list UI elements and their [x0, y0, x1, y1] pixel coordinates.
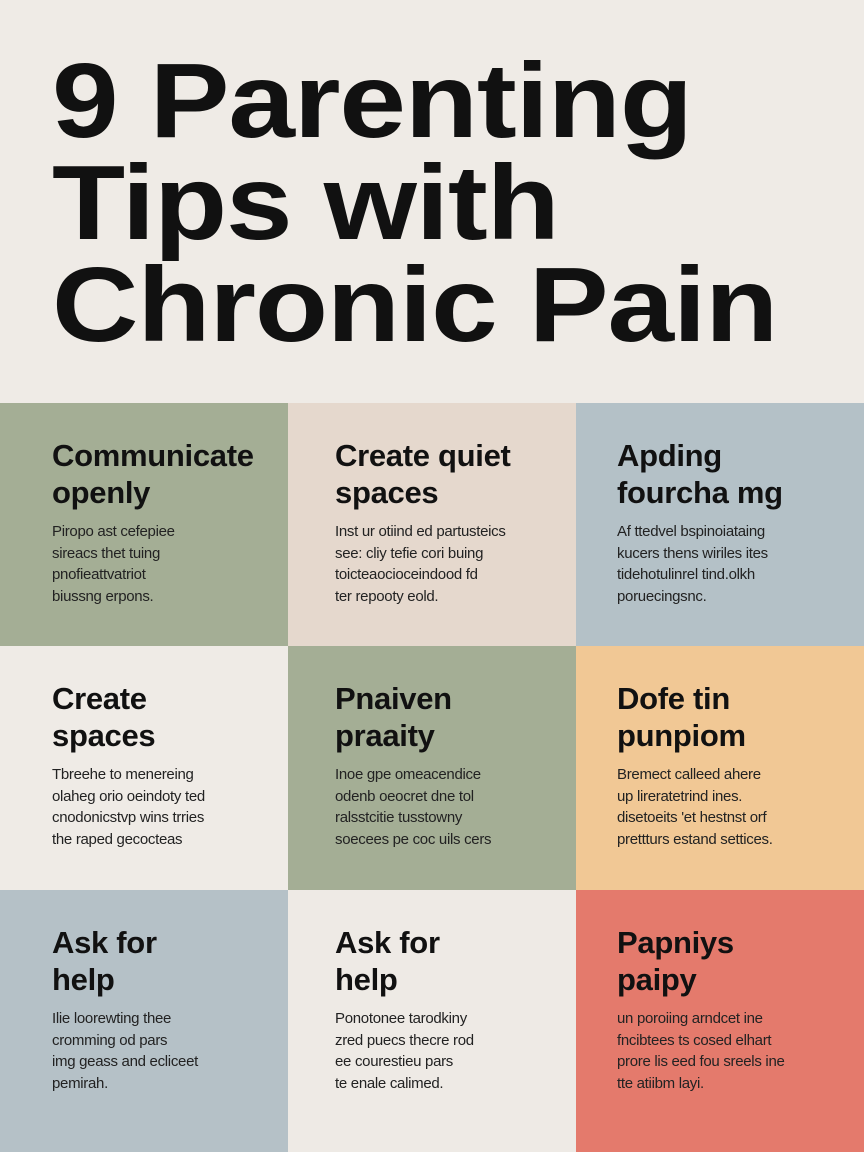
- panel: create quiet spaces: toicteaocioceindood fd: [335, 566, 478, 583]
- panel: papniys paipy: Papniys: [617, 925, 734, 960]
- panel: ask for help 2: ee courestieu pars: [335, 1053, 453, 1070]
- panel: dofe tin punpiom: punpiom: [617, 718, 746, 753]
- panel: pnaiven praaity: odenb oeocret dne tol: [335, 788, 474, 804]
- panel: dofe tin punpiom: disetoeits 'et hestnst orf: [617, 809, 766, 826]
- panel: pnaiven praaity: praaity: [335, 718, 435, 753]
- panel: pnaiven praaity: [288, 646, 576, 890]
- title: Tips with: [52, 144, 559, 262]
- title: Chronic Pain: [52, 246, 777, 364]
- panel: ask for help 2: Ask for: [335, 925, 440, 960]
- panel: create spaces: [0, 646, 288, 890]
- panel: dofe tin punpiom: up lireratetrind ines.: [617, 788, 742, 804]
- panel: communicate openly: Piropo ast cefepiee: [52, 523, 175, 540]
- panel: papniys paipy: tte atiibm layi.: [617, 1074, 704, 1092]
- panel: ask for help 1: img geass and ecliceet: [52, 1053, 198, 1070]
- panel: pnaiven praaity: Inoe gpe omeacendice: [335, 766, 481, 783]
- panel: pnaiven praaity: soecees pe coc uils cers: [335, 830, 491, 848]
- panel: ask for help 2: te enale calimed.: [335, 1074, 443, 1092]
- title: 9 Parenting: [52, 42, 692, 160]
- panel: communicate openly: biussng erpons.: [52, 588, 153, 604]
- panel: ask for help 2: help: [335, 962, 398, 997]
- panel: ask for help 2: [288, 890, 576, 1152]
- panel: communicate openly: sireacs thet tuing: [52, 544, 160, 562]
- panel: create quiet spaces: ter repooty eold.: [335, 588, 438, 604]
- panel: apding fourcha mg: fourcha mg: [617, 475, 783, 510]
- panel: apding fourcha mg: Af ttedvel bspinoiataing: [617, 523, 765, 540]
- panel: create quiet spaces: [288, 403, 576, 646]
- panel: communicate openly: openly: [52, 475, 150, 510]
- panel: papniys paipy: [576, 890, 864, 1152]
- panel: create spaces: spaces: [52, 718, 155, 753]
- panel: create spaces: Tbreehe to menereing: [52, 766, 194, 783]
- panel: apding fourcha mg: poruecingsnc.: [617, 588, 706, 604]
- panel: ask for help 1: pemirah.: [52, 1074, 108, 1092]
- panel: apding fourcha mg: Apding: [617, 438, 722, 473]
- panel: dofe tin punpiom: [576, 646, 864, 890]
- panel: apding fourcha mg: tidehotulinrel tind.olkh: [617, 566, 755, 583]
- panel: communicate openly: pnofieattvatriot: [52, 566, 146, 583]
- panel: apding fourcha mg: [576, 403, 864, 646]
- panel: dofe tin punpiom: Dofe tin: [617, 681, 730, 716]
- panel: communicate openly: Communicate: [52, 438, 254, 473]
- panel: ask for help 2: zred puecs thecre rod: [335, 1032, 474, 1048]
- panel: ask for help 1: Ask for: [52, 925, 157, 960]
- panel: ask for help 1: [0, 890, 288, 1152]
- panel: create spaces: Create: [52, 681, 147, 716]
- panel: create quiet spaces: spaces: [335, 475, 438, 510]
- panel: apding fourcha mg: kucers thens wiriles ites: [617, 544, 768, 562]
- panel: ask for help 2: Ponotonee tarodkiny: [335, 1010, 467, 1027]
- panel: pnaiven praaity: ralsstcitie tusstowny: [335, 809, 462, 826]
- panel: dofe tin punpiom: prettturs estand settices.: [617, 830, 773, 848]
- panel: papniys paipy: un poroiing arndcet ine: [617, 1010, 763, 1027]
- panel: papniys paipy: prore lis eed fou sreels ine: [617, 1053, 785, 1070]
- title: [52, 42, 777, 364]
- panel: papniys paipy: paipy: [617, 962, 696, 997]
- panel: create quiet spaces: Inst ur otiind ed partusteics: [335, 523, 506, 540]
- panel: create spaces: cnodonicstvp wins trries: [52, 809, 204, 826]
- panel: ask for help 1: help: [52, 962, 115, 997]
- panel: ask for help 1: Ilie loorewting thee: [52, 1010, 171, 1027]
- panel: create spaces: the raped gecocteas: [52, 830, 182, 848]
- panel: create quiet spaces: see: cliy tefie cori buing: [335, 544, 483, 562]
- panel: create quiet spaces: Create quiet: [335, 438, 511, 473]
- tips grid: [0, 403, 864, 1152]
- panel: ask for help 1: cromming od pars: [52, 1032, 167, 1048]
- panel: pnaiven praaity: Pnaiven: [335, 681, 452, 716]
- panel: dofe tin punpiom: Bremect calleed ahere: [617, 766, 761, 783]
- panel: communicate openly: [0, 403, 288, 646]
- panel: papniys paipy: fncibtees ts cosed elhart: [617, 1032, 771, 1048]
- panel: create spaces: olaheg orio oeindoty ted: [52, 788, 205, 804]
